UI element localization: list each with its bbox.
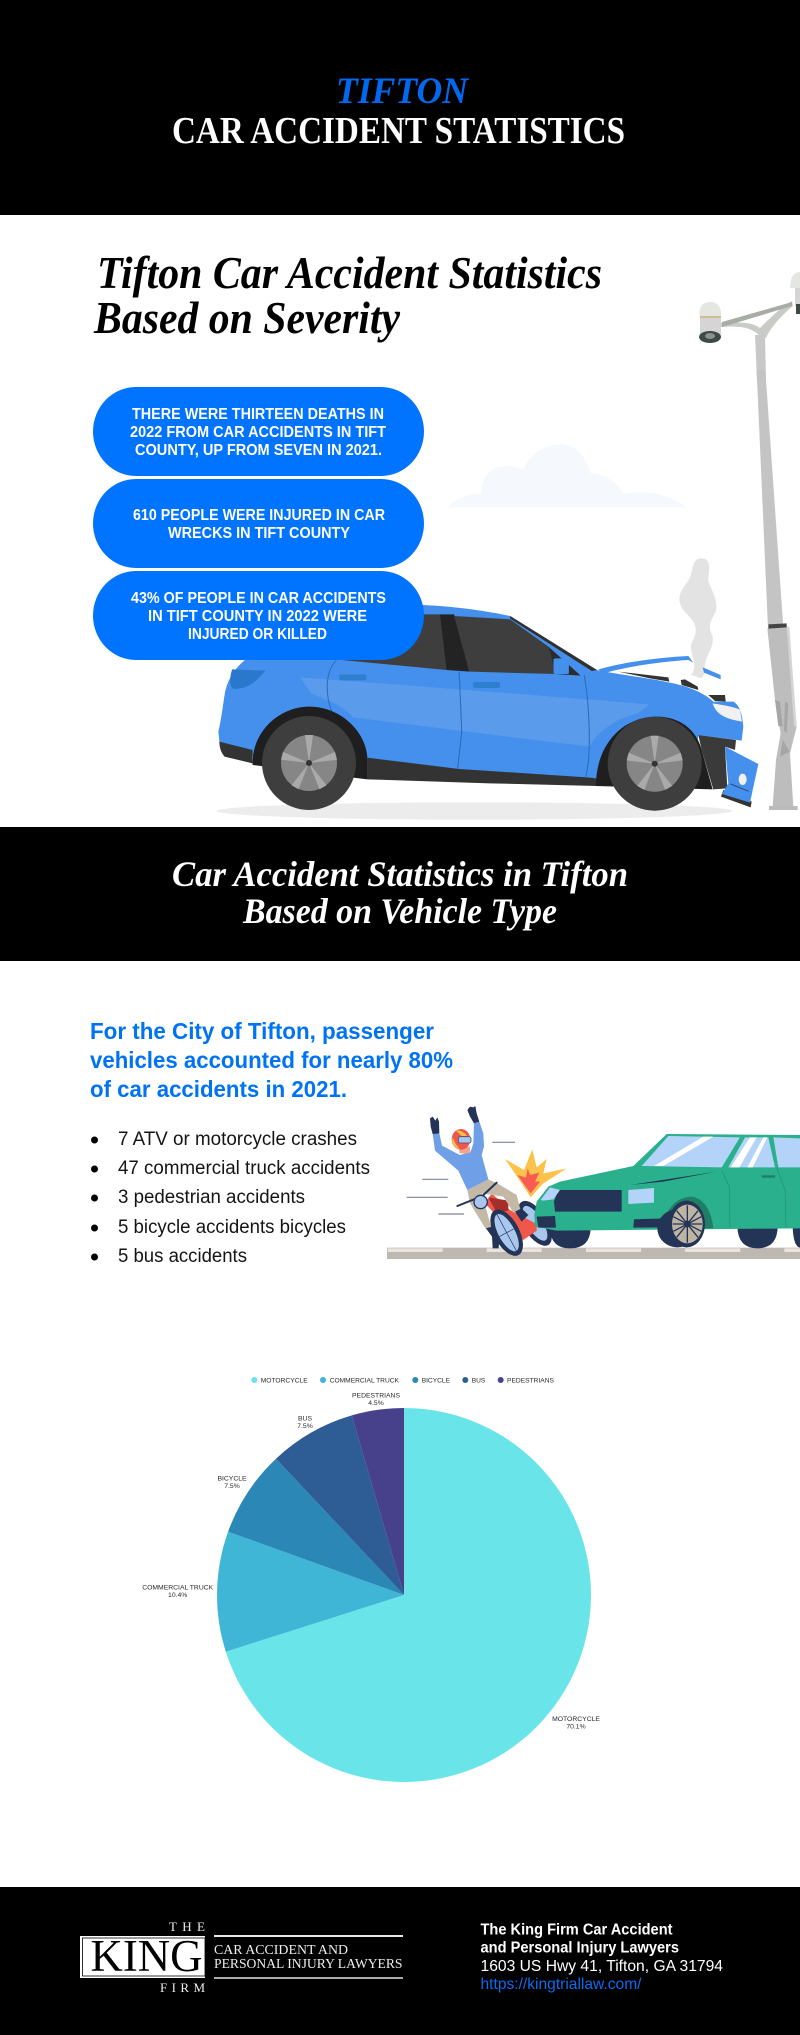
illustration: street lamp xyxy=(699,272,800,380)
callout: 610 injured: 610 PEOPLE WERE INJURED IN CAR xyxy=(133,507,385,524)
slice: bus xyxy=(276,1415,404,1595)
footer band xyxy=(0,1887,800,2035)
callout: 43 percent: 43% OF PEOPLE IN CAR ACCIDENTS xyxy=(131,590,386,607)
header band xyxy=(0,0,800,215)
legend: MOTORCYCLE xyxy=(261,1377,308,1384)
cloud and shadow xyxy=(217,370,783,820)
text block: passenger vehicles xyxy=(90,1018,453,1102)
car front details xyxy=(596,656,758,807)
car body xyxy=(218,605,599,778)
bullet list xyxy=(91,1129,370,1267)
callout: thirteen deaths: THERE WERE THIRTEEN DEATHS IN xyxy=(132,406,384,423)
logo: The King Firm: FIRM xyxy=(160,1980,205,1995)
illustration: motorcycle crash xyxy=(387,1106,800,1261)
slice: pedestrians xyxy=(352,1408,404,1595)
slice labels: 4.5% xyxy=(368,1400,384,1407)
legend xyxy=(251,1377,554,1384)
callout: 43 percent xyxy=(93,571,424,660)
contact details: 1603 US Hwy 41, Tifton, GA 31794 xyxy=(480,1958,723,1975)
title: Car Accident Statistics: CAR ACCIDENT STATISTICS xyxy=(172,110,625,152)
text block: passenger vehicles: For the City of Tifton, passenger xyxy=(90,1018,434,1044)
bullet list: 5 bicycle accidents bicycles xyxy=(118,1217,346,1238)
logo: The King Firm: CAR ACCIDENT AND xyxy=(214,1943,348,1958)
pole, lower part xyxy=(767,623,798,810)
heading: severity xyxy=(93,247,602,343)
callout: thirteen deaths xyxy=(93,387,424,476)
logo: The King Firm: KING xyxy=(90,1931,202,1981)
front wheel xyxy=(608,717,702,811)
text block: passenger vehicles: of car accidents in 2021. xyxy=(90,1076,347,1102)
body highlight, windows, handles and skirt xyxy=(219,614,649,786)
speed lines xyxy=(407,1142,515,1214)
callout: 43 percent: INJURED OR KILLED xyxy=(188,626,327,643)
gloves xyxy=(430,1106,479,1134)
callout: 43 percent: IN TIFT COUNTY IN 2022 WERE xyxy=(148,608,367,625)
slice labels: 7.5% xyxy=(224,1483,240,1490)
green car tires xyxy=(550,1227,800,1248)
slice: commercial truck xyxy=(217,1532,404,1652)
bullet list: 5 bus accidents xyxy=(118,1246,247,1267)
contact details: and Personal Injury Lawyers xyxy=(480,1940,679,1957)
slice labels xyxy=(142,1392,600,1730)
green car front details xyxy=(537,1167,786,1228)
logo: The King Firm: THE xyxy=(169,1919,205,1934)
rider torso xyxy=(433,1122,488,1190)
pie chart: accident types xyxy=(142,1377,600,1782)
rear motorcycle wheel xyxy=(511,1195,559,1251)
headlight and handlebar xyxy=(457,1183,497,1209)
callout: thirteen deaths: 2022 FROM CAR ACCIDENTS IN TIFT xyxy=(130,424,386,441)
slice labels: 7.5% xyxy=(297,1423,313,1430)
text block: passenger vehicles: vehicles accounted for nearly 80% xyxy=(90,1047,453,1073)
slice: motorcycle xyxy=(226,1408,591,1782)
rider trousers xyxy=(467,1179,521,1229)
callout: 610 injured xyxy=(93,479,424,568)
callout: thirteen deaths: COUNTY, UP FROM SEVEN IN 2021. xyxy=(135,442,382,459)
explosion xyxy=(505,1149,567,1197)
green car body xyxy=(534,1134,800,1231)
slice labels: 70.1% xyxy=(566,1724,586,1730)
legend: PEDESTRIANS xyxy=(507,1377,554,1384)
boots xyxy=(486,1208,528,1248)
rear wheel xyxy=(262,716,356,810)
car front wing xyxy=(580,667,743,778)
callout: 610 injured: WRECKS IN TIFT COUNTY xyxy=(168,525,351,542)
slice labels: BICYCLE xyxy=(217,1476,247,1483)
road xyxy=(387,1248,800,1259)
legend: BUS xyxy=(472,1377,486,1384)
contact details: The King Firm Car Accident xyxy=(480,1922,673,1939)
slice labels: COMMERCIAL TRUCK xyxy=(142,1584,214,1591)
illustration: crashed blue car xyxy=(217,370,798,820)
green car windows xyxy=(642,1136,800,1167)
slice: bicycle xyxy=(228,1459,404,1595)
heading band: vehicle type: Car Accident Statistics in Tifton xyxy=(172,854,628,894)
legend: COMMERCIAL TRUCK xyxy=(330,1377,399,1384)
contact details: https://kingtriallaw.com/ xyxy=(480,1976,642,1993)
heading band: vehicle type: Based on Vehicle Type xyxy=(242,891,557,931)
slice labels: 10.4% xyxy=(168,1592,187,1599)
bullet list: 47 commercial truck accidents xyxy=(118,1158,370,1179)
front motorcycle wheel xyxy=(484,1204,530,1261)
slice labels: MOTORCYCLE xyxy=(552,1716,600,1723)
bullet list: 3 pedestrian accidents xyxy=(118,1187,305,1208)
heading: severity: Based on Severity xyxy=(93,292,401,343)
motorcycle frame xyxy=(485,1193,537,1240)
contact details xyxy=(480,1922,723,1993)
logo: The King Firm: PERSONAL INJURY LAWYERS xyxy=(214,1957,402,1972)
heading band: vehicle type xyxy=(0,827,800,961)
slice labels: BUS xyxy=(298,1416,312,1422)
logo: The King Firm xyxy=(80,1919,403,1995)
legend: BICYCLE xyxy=(422,1377,450,1384)
bullet list: 7 ATV or motorcycle crashes xyxy=(118,1129,357,1150)
helmet xyxy=(452,1129,471,1153)
slice labels: PEDESTRIANS xyxy=(352,1392,400,1400)
green car front wheel xyxy=(657,1197,713,1247)
heading: severity: Tifton Car Accident Statistics xyxy=(97,247,602,298)
title: Tifton: TIFTON xyxy=(336,71,469,112)
